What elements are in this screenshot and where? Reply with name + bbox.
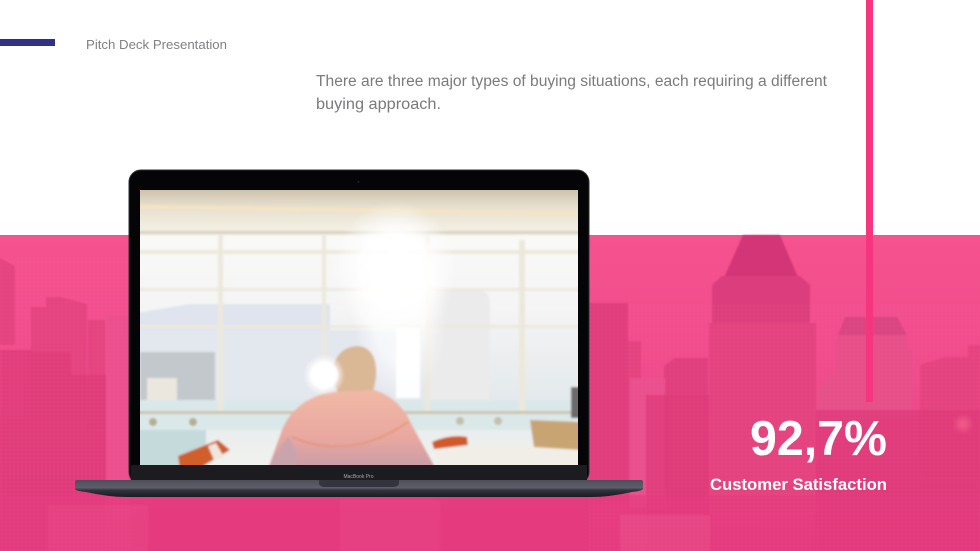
laptop notch bbox=[319, 480, 399, 487]
intro text: There are three major types of buying situations, each requiring a different bbox=[316, 73, 828, 90]
intro text: buying approach. bbox=[316, 96, 441, 113]
laptop model label: MacBook Pro bbox=[343, 474, 374, 480]
man head and shoulders bbox=[332, 346, 376, 398]
laptop camera bbox=[358, 181, 360, 183]
vertical accent line bbox=[866, 0, 873, 402]
pink city skyline band bbox=[0, 235, 980, 551]
statistic value: 92,7% bbox=[750, 412, 887, 466]
laptop screen photo: man facing sunlit window bbox=[136, 186, 582, 469]
statistic caption: Customer Satisfaction bbox=[710, 476, 887, 494]
header label: Pitch Deck Presentation bbox=[86, 37, 227, 52]
intro text bbox=[316, 73, 828, 113]
laptop lid bbox=[129, 170, 589, 484]
laptop bbox=[75, 170, 643, 497]
laptop base bbox=[75, 480, 643, 497]
header accent bar bbox=[0, 39, 55, 46]
